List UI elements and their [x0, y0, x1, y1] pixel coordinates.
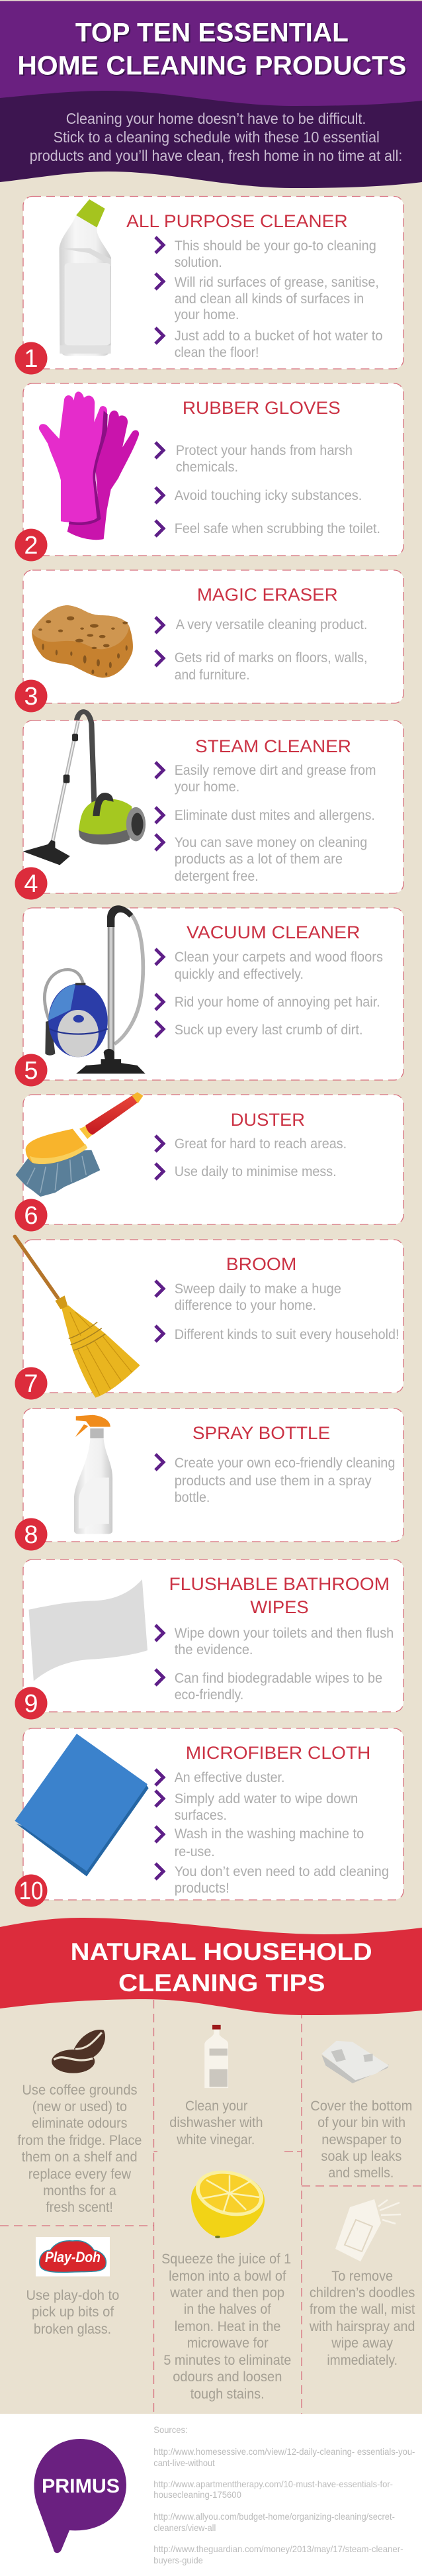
number 8: 8 — [24, 1521, 38, 1549]
heading: MAGIC ERASER — [197, 585, 338, 605]
text: Clean your — [185, 2099, 247, 2114]
title: TOP TEN ESSENTIAL — [75, 19, 349, 48]
bullet list: your home. — [175, 779, 239, 795]
bullet list: clean the floor! — [175, 345, 259, 360]
panel: all purpose cleaner — [15, 196, 403, 375]
heading: MICROFIBER CLOTH — [186, 1743, 370, 1763]
sources — [153, 2424, 415, 2565]
heading — [169, 1574, 390, 1617]
bullet list: eco-friendly. — [175, 1687, 243, 1703]
text: from the fridge. Place — [17, 2133, 142, 2148]
section banner: natural household cleaning tips — [0, 1918, 422, 2015]
text: children’s doodles — [310, 2285, 415, 2301]
text: (new or used) to — [32, 2099, 127, 2114]
bullet list: products! — [175, 1881, 230, 1896]
bullet list: Create your own eco-friendly cleaning — [175, 1456, 395, 1471]
text: newspaper to — [321, 2132, 401, 2148]
bullet list: the evidence. — [175, 1642, 253, 1658]
icon: spray bottle — [74, 1415, 112, 1534]
sources: Sources: — [153, 2424, 188, 2435]
text: microwave for — [187, 2336, 269, 2351]
text: them on a shelf and — [22, 2150, 138, 2165]
text — [26, 2288, 119, 2337]
intro text: Stick to a cleaning schedule with these 10 essential — [54, 128, 380, 146]
icon: broom — [15, 1236, 140, 1398]
text: broken glass. — [34, 2322, 111, 2337]
tip: coffee grounds — [17, 2030, 142, 2215]
text — [310, 2099, 412, 2181]
panel: rubber gloves — [15, 383, 403, 562]
heading: ALL PURPOSE CLEANER — [126, 211, 348, 231]
bullet list: Wash in the washing machine to — [175, 1826, 364, 1842]
text: water and then pop — [169, 2285, 284, 2301]
text: Squeeze the juice of 1 — [161, 2252, 291, 2267]
bullet list — [155, 1625, 394, 1703]
text: Use play-doh to — [26, 2288, 119, 2303]
heading: FLUSHABLE BATHROOM — [169, 1574, 390, 1594]
text: white vinegar. — [176, 2132, 255, 2148]
bullet list: chemicals. — [176, 460, 238, 475]
intro text: Cleaning your home doesn’t have to be difficult. — [66, 110, 366, 127]
bullet list: You don’t even need to add cleaning — [175, 1864, 389, 1879]
title: HOME CLEANING PRODUCTS — [17, 52, 406, 81]
bullet list: Sweep daily to make a huge — [175, 1281, 341, 1297]
bullet list: surfaces. — [175, 1808, 227, 1823]
intro text: products and you’ll have clean, fresh home in no time at all: — [30, 147, 402, 164]
bullet list: An effective duster. — [175, 1770, 284, 1785]
panel: duster — [15, 1092, 403, 1232]
bullet list: products and use them in a spray — [175, 1473, 372, 1489]
text: from the wall, mist — [310, 2302, 415, 2317]
bullet list: and furniture. — [175, 668, 250, 683]
bullet list: Great for hard to reach areas. — [175, 1136, 347, 1152]
tip: newspaper — [310, 2041, 412, 2181]
bullet list: solution. — [175, 255, 222, 270]
number 6 — [15, 1199, 48, 1232]
tip: play-doh — [26, 2237, 119, 2337]
number 1 — [15, 342, 48, 375]
panel: spray bottle — [15, 1409, 403, 1551]
text: soak up leaks — [321, 2149, 401, 2164]
text: and smells. — [328, 2165, 394, 2181]
section banner: natural household cleaning tips: CLEANING TIPS — [118, 1969, 325, 1997]
logo: primus: PRIMUS — [42, 2475, 120, 2497]
text: of your bin with — [317, 2115, 405, 2130]
bullet list: Feel safe when scrubbing the toilet. — [175, 521, 380, 536]
text: replace every few — [28, 2167, 132, 2182]
text: with hairspray and — [309, 2319, 415, 2334]
bullet list — [155, 949, 383, 1038]
bullet list: Use daily to minimise mess. — [175, 1164, 337, 1179]
title: TOP TEN ESSENTIAL — [77, 20, 350, 49]
bullet list: Protect your hands from harsh — [176, 443, 353, 458]
number 10: 10 — [19, 1877, 44, 1905]
bullet list — [155, 1281, 400, 1342]
bullet list — [155, 237, 383, 360]
text: Cover the bottom — [310, 2099, 412, 2114]
intro wave band — [0, 91, 422, 188]
sources: http://www.apartmenttherapy.com/10-must-have-essentials-for- — [153, 2479, 393, 2489]
bullet list: quickly and effectively. — [175, 967, 304, 982]
tip: lemon — [161, 2163, 291, 2402]
sources: http://www.theguardian.com/money/2013/may/17/steam-cleaner- — [153, 2544, 403, 2554]
bullet list: Simply add water to wipe down — [175, 1791, 358, 1807]
text — [309, 2269, 415, 2368]
text: immediately. — [327, 2353, 398, 2368]
logo: primus — [34, 2439, 126, 2553]
sources: buyers-guide — [153, 2555, 203, 2565]
icon: cleaner bottle — [60, 199, 111, 356]
icon: brush duster — [16, 1092, 143, 1197]
bullet list — [155, 1136, 347, 1179]
number 4: 4 — [24, 870, 38, 898]
text — [161, 2252, 291, 2402]
bullet list: Can find biodegradable wipes to be — [175, 1671, 382, 1686]
icon: coffee beans — [52, 2030, 105, 2073]
bullet list: detergent free. — [175, 869, 259, 884]
heading: BROOM — [226, 1254, 296, 1274]
icon: vinegar bottle — [204, 2025, 228, 2088]
text: lemon. Heat in the — [175, 2319, 280, 2334]
section banner: natural household cleaning tips: NATURAL HOUSEHOLD — [71, 1938, 372, 1965]
bullet list — [155, 442, 380, 536]
text: Use coffee grounds — [22, 2083, 138, 2098]
title: HOME CLEANING PRODUCTS — [19, 53, 407, 82]
panel: vacuum cleaner — [15, 905, 403, 1086]
icon: gloves — [39, 391, 139, 540]
icon: wipe — [29, 1579, 148, 1681]
bullet list: Different kinds to suit every household! — [175, 1327, 400, 1342]
bullet list: You can save money on cleaning — [175, 835, 367, 850]
text — [17, 2083, 142, 2215]
sources: cleaners/view-all — [153, 2522, 216, 2533]
bullet list — [155, 1454, 395, 1505]
bullet list: re-use. — [175, 1844, 215, 1859]
text: in the halves of — [184, 2302, 271, 2317]
bullet list: Clean your carpets and wood floors — [175, 950, 383, 965]
heading: RUBBER GLOVES — [183, 398, 341, 418]
header banner — [0, 1, 422, 188]
number 3: 3 — [24, 683, 38, 711]
bullet list: and clean all kinds of surfaces in — [175, 291, 364, 307]
icon: cloth — [15, 1734, 149, 1876]
number 7 — [15, 1367, 48, 1400]
icon: hairspray can — [335, 2199, 401, 2261]
number 6: 6 — [24, 1202, 38, 1230]
bullet list — [155, 617, 368, 683]
icon: play-doh logo: Play-Doh — [45, 2249, 101, 2265]
sources: cant-live-without — [153, 2457, 215, 2468]
bullet list: products as a lot of them are — [175, 852, 343, 867]
heading: VACUUM CLEANER — [187, 922, 360, 942]
bullet list: Avoid touching icky substances. — [175, 488, 362, 503]
tip: hairspray — [309, 2199, 415, 2368]
text: wipe away — [331, 2336, 394, 2351]
tip: white vinegar — [169, 2025, 263, 2148]
title — [17, 19, 407, 82]
panel: microfiber cloth — [15, 1728, 403, 1907]
text: odours and loosen — [173, 2369, 282, 2385]
icon: lemon — [191, 2163, 268, 2238]
bullet list: Gets rid of marks on floors, walls, — [175, 650, 368, 666]
panel: flushable bathroom wipes — [15, 1560, 403, 1719]
panel: magic eraser — [15, 570, 403, 713]
number 5: 5 — [24, 1057, 38, 1085]
number 2 — [15, 528, 48, 562]
text: pick up bits of — [32, 2304, 114, 2320]
icon: play-doh logo — [36, 2237, 110, 2277]
bullet list: Easily remove dirt and grease from — [175, 763, 376, 778]
number 9: 9 — [24, 1690, 38, 1718]
number 3 — [15, 679, 48, 713]
bullet list: difference to your home. — [175, 1298, 316, 1313]
footer — [0, 2414, 422, 2576]
panel: steam cleaner — [15, 712, 403, 899]
heading: WIPES — [250, 1597, 309, 1617]
bullet list: Wipe down your toilets and then flush — [175, 1626, 394, 1641]
text: To remove — [331, 2269, 393, 2284]
number 9 — [15, 1687, 48, 1719]
text: fresh scent! — [46, 2200, 113, 2215]
bullet list: Just add to a bucket of hot water to — [175, 328, 383, 344]
bullet list: your home. — [175, 307, 239, 322]
number 8 — [15, 1518, 48, 1551]
number 5 — [15, 1054, 48, 1086]
bullet list: This should be your go-to cleaning — [175, 238, 376, 254]
text: lemon into a bowl of — [169, 2269, 286, 2284]
bullet list — [155, 762, 376, 884]
bullet list: Eliminate dust mites and allergens. — [175, 808, 375, 823]
text: dishwasher with — [169, 2115, 263, 2130]
number 2: 2 — [24, 532, 38, 560]
heading: DUSTER — [231, 1110, 305, 1130]
text: 5 minutes to eliminate — [163, 2353, 291, 2368]
bullet list — [155, 1769, 389, 1896]
panel: broom — [15, 1236, 403, 1400]
bullet list: Will rid surfaces of grease, sanitise, — [175, 275, 379, 290]
icon: steam cleaner — [23, 712, 146, 865]
heading: STEAM CLEANER — [195, 736, 351, 756]
number 1: 1 — [24, 345, 38, 373]
bullet list: Suck up every last crumb of dirt. — [175, 1022, 362, 1038]
icon: vacuum — [44, 905, 146, 1073]
sources: housecleaning-175600 — [153, 2489, 241, 2500]
bullet list: Rid your home of annoying pet hair. — [175, 995, 380, 1010]
text — [169, 2099, 263, 2148]
text: eliminate odours — [32, 2116, 127, 2131]
number 7: 7 — [24, 1370, 38, 1398]
number 4 — [15, 867, 48, 899]
bullet list: A very versatile cleaning product. — [176, 617, 367, 632]
text: tough stains. — [190, 2387, 265, 2402]
intro text — [30, 110, 402, 164]
icon: sponge — [32, 605, 133, 678]
icon: newspaper — [321, 2041, 389, 2083]
sources: http://www.allyou.com/budget-home/organizing-cleaning/secret- — [153, 2511, 395, 2522]
bullet list: bottle. — [175, 1490, 210, 1505]
heading: SPRAY BOTTLE — [192, 1423, 330, 1443]
text: months for a — [43, 2183, 116, 2199]
